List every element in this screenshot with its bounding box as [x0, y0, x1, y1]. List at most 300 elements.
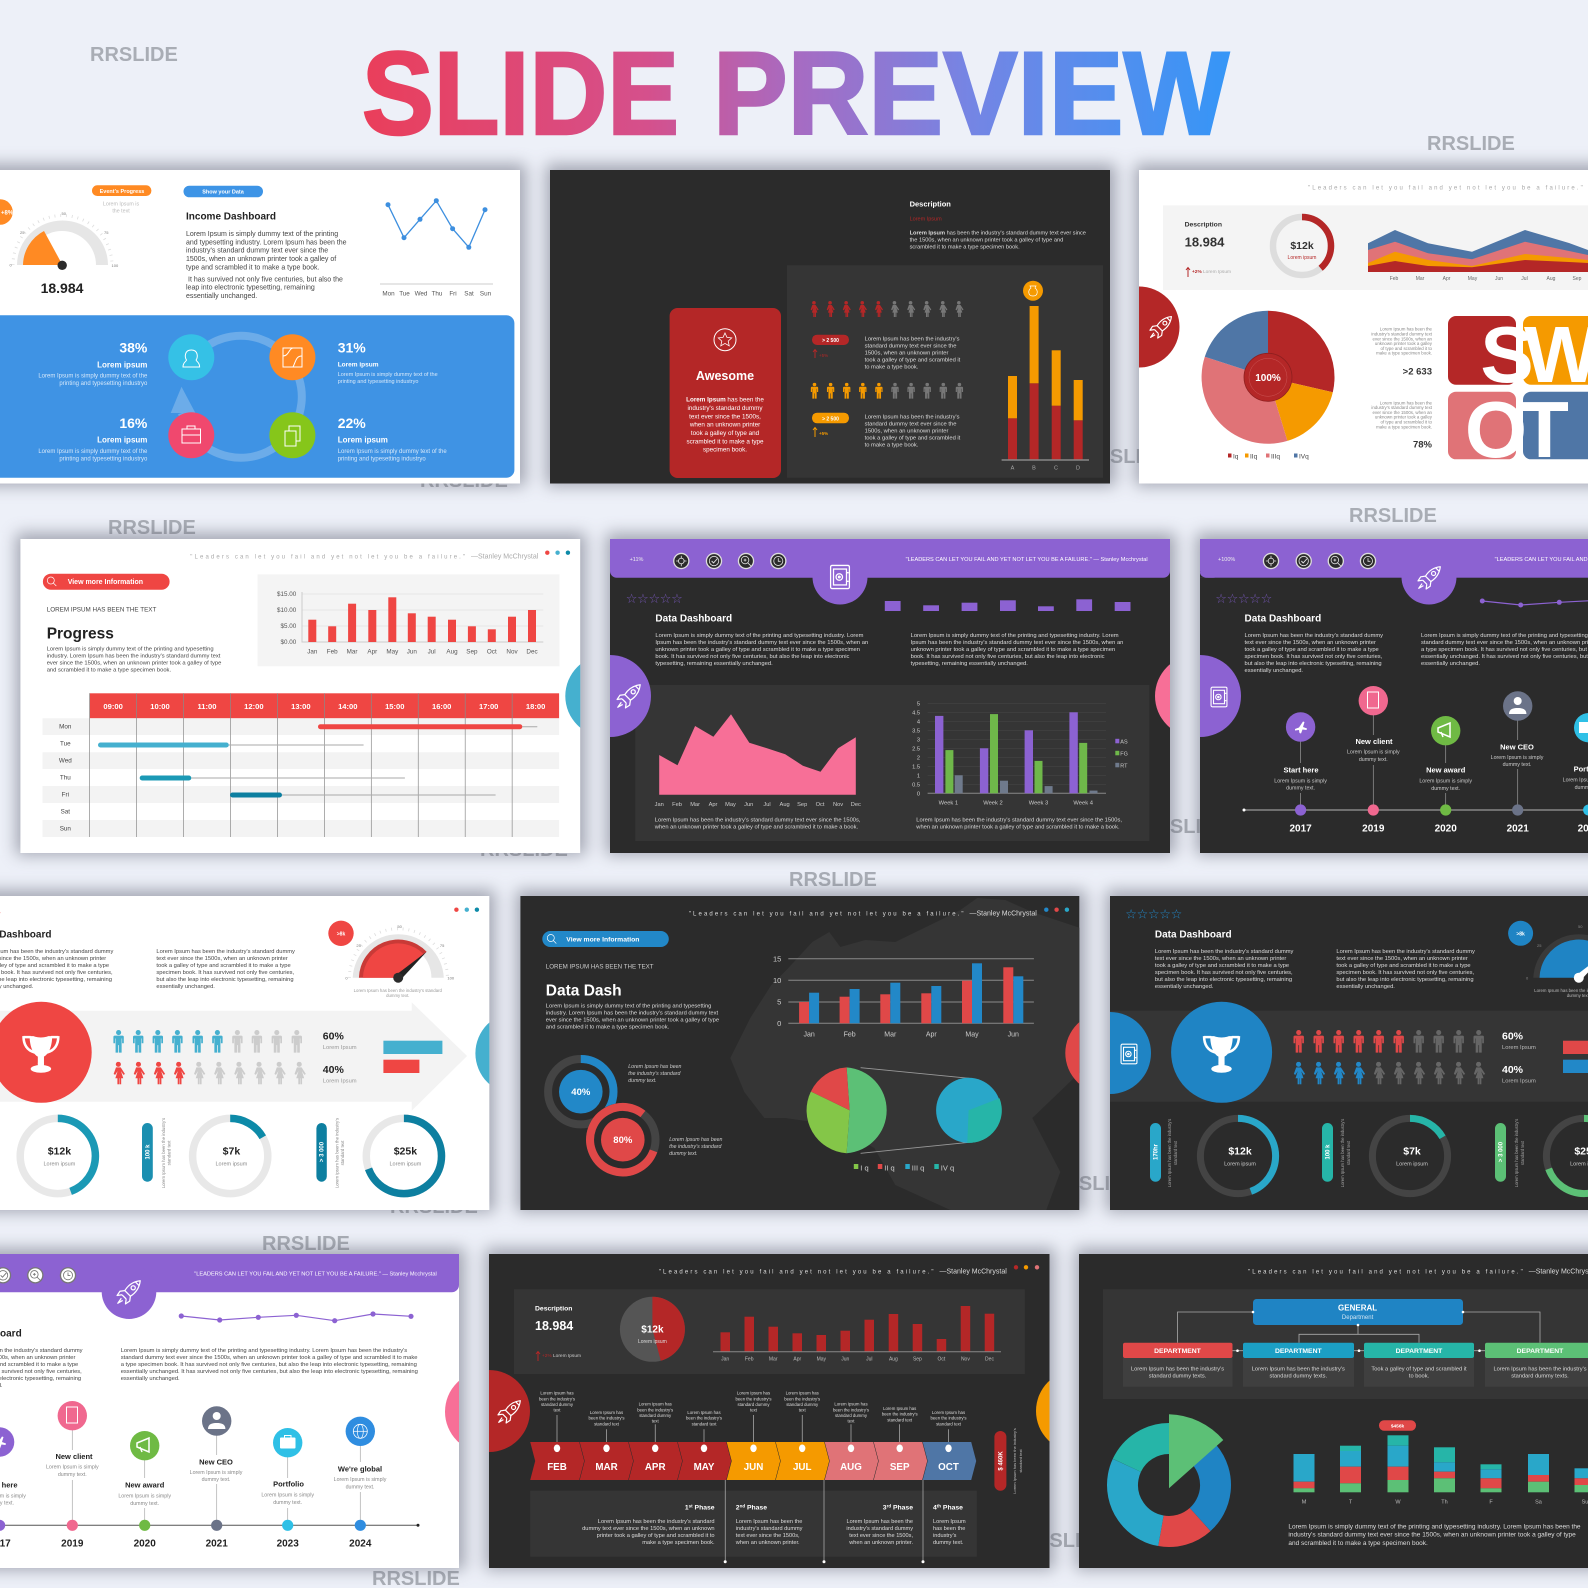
phase 1: printer took a galley of type and scrambled it to — [597, 1533, 715, 1539]
text block: 1500s, when an unknown printer — [865, 428, 948, 434]
milestone 2023: 2023 — [277, 1539, 299, 1550]
body column: Lorem Ipsum is simply dummy text of the printing and typesetting industry. Lorem — [911, 633, 1119, 639]
body column: a type specimen book. It has survived not only five centuries, but also the leap into electronic typesetting, remaining — [121, 1362, 417, 1368]
watermark: RRSLIDE — [108, 517, 196, 539]
title — [362, 28, 1230, 160]
bar chart panel: Jun — [407, 649, 417, 656]
gauge: Lorem Ipsum has been the industry's standard — [354, 988, 443, 993]
department notes — [1123, 1358, 1588, 1387]
gauge — [345, 924, 455, 998]
area chart: Feb — [1390, 276, 1399, 282]
grouped bar chart — [912, 701, 1128, 806]
map background — [730, 898, 1080, 1210]
text block with stat: unknown printer took a galley — [1375, 341, 1433, 346]
milestone 2020: 2020 — [1435, 824, 1457, 835]
stats: Lorem Ipsum — [1502, 1045, 1536, 1051]
header band — [0, 1254, 459, 1292]
milestone 2020: 2020 — [134, 1539, 156, 1550]
body text: essentially unchanged. — [186, 293, 257, 300]
milestone 2019 — [46, 1401, 99, 1550]
phase 2: Phase — [745, 1504, 767, 1511]
bar chart: 15 — [773, 954, 781, 964]
description text: Description — [910, 199, 951, 208]
body text: ever since the 1500s, when an unknown printer took a galley of type — [546, 1018, 719, 1024]
department boxes: DEPARTMENT — [1396, 1348, 1443, 1355]
area chart: Mar — [1416, 276, 1425, 282]
stacked bar chart: F — [1489, 1499, 1493, 1505]
stacked bar chart: Sa — [1535, 1499, 1543, 1505]
bar chart panel: Oct — [487, 649, 497, 656]
icon circle: rocket — [102, 1264, 156, 1319]
notes above chevrons: Lorem Ipsum has — [932, 1410, 965, 1415]
caption: the text — [112, 208, 130, 214]
pill + caption: standard text — [1520, 1140, 1525, 1165]
stacked bar chart: A — [1011, 465, 1015, 471]
body column — [0, 1348, 83, 1389]
legend: Iq — [1233, 454, 1239, 460]
card: awesome: when an unknown printer — [689, 422, 760, 429]
pill: show your data: Show your Data — [202, 190, 245, 196]
body text: industry's standard dummy text ever since the 1500s, when an unknown printer took a galley of type — [1288, 1532, 1576, 1539]
stat 16%: Lorem ipsum — [97, 436, 147, 445]
notes above chevrons: been the industry's — [882, 1412, 918, 1417]
stats — [323, 1030, 357, 1084]
header band: +11% — [630, 557, 644, 563]
body column: specimen book. It has survived not only five centuries, — [1244, 654, 1383, 660]
panel — [635, 685, 1149, 841]
stats — [1502, 1030, 1536, 1084]
schedule table: Mon — [59, 724, 72, 730]
body column: text ever since the 1500s, when an unknown printer — [1244, 640, 1376, 646]
pill + caption — [1322, 1119, 1351, 1187]
phase 2: industry's standard dummy — [736, 1526, 803, 1532]
schedule table: Thu — [60, 774, 71, 782]
milestone 2017: dummy text. — [1286, 785, 1315, 791]
notes above chevrons: been the industry's — [784, 1396, 820, 1401]
pill: view more: View more Information — [68, 579, 143, 586]
milestone 2021 — [190, 1406, 243, 1550]
line chart: Mon — [382, 291, 395, 298]
bar chart: Aug — [889, 1357, 898, 1363]
chevron timeline: MAR — [595, 1462, 618, 1473]
description text — [910, 199, 1086, 250]
heading: Data Dashboard — [655, 614, 732, 625]
area chart: Aug — [1547, 276, 1556, 282]
bar chart: Apr — [793, 1357, 802, 1363]
gauge — [1526, 924, 1588, 998]
pill + caption: 100 k — [1326, 1144, 1332, 1160]
donut $25k — [1546, 1118, 1588, 1194]
body text: leap into electronic typesetting, remaining — [186, 285, 315, 292]
pictogram: women — [1294, 1062, 1485, 1084]
schedule table: 15:00 — [385, 702, 405, 711]
legend: IVq — [1299, 454, 1309, 460]
body column: took a galley of type and scrambled it to make a type — [1244, 647, 1379, 653]
body column: Lorem Ipsum has been the industry's standard dummy — [1336, 949, 1475, 955]
body column: essentially unchanged. — [121, 1376, 180, 1382]
schedule table: Sat — [61, 808, 70, 816]
icon circle: rocket — [448, 1370, 530, 1452]
legend: IIIq — [1271, 454, 1280, 460]
stacked bar chart: D — [1076, 465, 1080, 471]
gauge: 50 — [1578, 924, 1583, 929]
donut: Lorem ipsum — [1288, 255, 1316, 261]
caption: dummy text. — [628, 1078, 657, 1084]
slide: timeline light — [0, 1254, 459, 1568]
area chart: Jul — [1521, 276, 1528, 282]
stacked bar chart: T — [1349, 1499, 1353, 1505]
notes above chevrons: Lorem Ipsum has — [590, 1410, 623, 1415]
body column: text ever since the 1500s, when an unknown printer — [1155, 956, 1286, 962]
text block with stat: 78% — [1413, 439, 1433, 450]
body column: Lorem Ipsum has been the industry's standard dummy — [1155, 949, 1294, 955]
phase 4: industry's — [933, 1533, 957, 1539]
pill + caption: > 3 000 — [320, 1141, 326, 1162]
body text: Lorem Ipsum is simply dummy text of the printing — [186, 231, 338, 238]
icon: documents — [269, 412, 315, 458]
phase dividers — [724, 1480, 924, 1563]
area chart: Sep — [797, 802, 807, 808]
body column — [121, 1348, 418, 1382]
schedule table: Fri — [62, 792, 69, 798]
line chart: Fri — [449, 291, 457, 298]
phase 4: Phase — [941, 1504, 963, 1511]
general box: GENERAL — [1338, 1304, 1377, 1313]
body column: book. It has survived not only five centuries, but also the leap into electronic — [911, 654, 1105, 660]
arrow band — [0, 1002, 467, 1111]
panel: summary — [514, 1289, 1025, 1374]
caption — [103, 202, 139, 214]
description — [535, 1305, 581, 1361]
body text: It has survived not only five centuries, but also the — [188, 276, 343, 283]
bar chart panel: Sep — [466, 649, 478, 656]
stars: ☆☆☆☆☆ — [1125, 908, 1182, 922]
vertical pill + caption — [994, 1428, 1023, 1494]
pictogram: men — [811, 383, 963, 399]
grouped bar chart: 3.5 — [912, 728, 920, 734]
stat 22%: Lorem ipsum — [338, 436, 388, 445]
text block: to make a type book. — [865, 442, 919, 448]
phase 4: dummy text. — [933, 1540, 964, 1546]
gauge: 0 — [10, 262, 12, 268]
notes above chevrons: text — [799, 1408, 806, 1413]
phase 2: text ever since the 1500s, — [736, 1533, 800, 1539]
pill + caption: 170hr — [1154, 1143, 1160, 1160]
donut $12k: $12k — [1228, 1145, 1252, 1157]
watermark: RRSLIDE — [1349, 505, 1437, 527]
caption: Lorem Ipsum has been — [628, 1064, 681, 1070]
stat 16%: Lorem Ipsum is simply dummy text of the — [38, 449, 148, 455]
slide: timeline dark — [1200, 539, 1588, 853]
side circle — [565, 655, 647, 737]
milestone 2020 — [118, 1431, 171, 1550]
body column — [1244, 633, 1383, 674]
milestone 2024: dummy text. — [346, 1484, 374, 1490]
schedule table: Wed — [59, 758, 72, 764]
notes above chevrons: Lorem Ipsum has — [540, 1391, 574, 1396]
stat 38%: 38% — [119, 340, 148, 356]
description text: the 1500s, when an unknown printer took a galley of type and — [910, 237, 1063, 243]
stat 22%: Lorem Ipsum is simply dummy text of the — [338, 449, 447, 455]
grouped bar chart: Week 4 — [1073, 800, 1094, 806]
donut $25k — [366, 1118, 441, 1194]
swot tiles — [1448, 310, 1588, 474]
chevron timeline: AUG — [840, 1462, 862, 1473]
notes above chevrons: been the industry's — [589, 1416, 624, 1421]
pill: show your data — [184, 186, 263, 197]
quote: "Leaders can let you fail and yet not let you be a failure." —Stanley McChrystal — [1248, 1268, 1588, 1275]
stat 38%: Lorem Ipsum is simply dummy text of the — [38, 374, 148, 380]
panel: phases — [530, 1491, 977, 1557]
body column: Ipsum has been the industry's standard dummy text ever since the 1500s, when an — [655, 640, 868, 646]
notes above chevrons: standard text — [692, 1421, 717, 1426]
milestone 2019: New client — [1355, 737, 1393, 746]
body column: but also the leap into electronic typesetting, remaining — [156, 977, 294, 983]
phase 3: Lorem Ipsum has been the — [846, 1519, 913, 1525]
bar chart panel: Mar — [347, 649, 358, 656]
body text — [186, 231, 347, 300]
bar chart panel: $10.00 — [277, 607, 297, 614]
pill — [812, 335, 849, 358]
schedule table: 12:00 — [244, 702, 264, 711]
text block with stat — [1371, 327, 1433, 377]
pie chart — [1202, 311, 1335, 444]
stat 22%: printing and typesetting industryo — [338, 456, 426, 462]
bar chart: Jun — [841, 1357, 850, 1363]
body text: industry's standard dummy text ever since the — [186, 248, 328, 255]
body column — [0, 949, 113, 990]
subheading: LOREM IPSUM HAS BEEN THE TEXT — [47, 607, 156, 614]
pill — [812, 413, 849, 437]
text: RRSLIDE — [480, 839, 568, 861]
quote: "Leaders can let you fail and yet not let you be a failure." —Stanley McChrystal — [689, 911, 1037, 918]
caption: dummy text. — [669, 1151, 698, 1157]
line chart: Tue — [399, 291, 410, 298]
body column: Lorem Ipsum is simply dummy text of the printing and typesetting industry. Lorem Ipsum has been the industry's — [121, 1348, 407, 1354]
stacked bar chart — [1002, 281, 1089, 471]
badge: >8k — [337, 931, 345, 937]
text: RRSLIDE — [390, 1196, 478, 1218]
caption — [915, 818, 1122, 831]
chevron timeline: APR — [645, 1462, 666, 1473]
text block — [865, 414, 961, 448]
body text: Lorem Ipsum is simply dummy text of the printing and typesetting — [47, 646, 214, 652]
schedule table: 16:00 — [432, 702, 451, 711]
notes above chevrons: been the industry's — [736, 1396, 771, 1401]
pill + caption: standard text — [1346, 1140, 1351, 1165]
milestone 2020 — [1419, 716, 1472, 835]
schedule table: 13:00 — [291, 702, 311, 711]
icon: team — [168, 334, 214, 380]
gauge: 0 — [345, 976, 348, 980]
bar chart: Apr — [926, 1031, 937, 1038]
pill + caption: Lorem Ipsum has been the industry's — [1167, 1119, 1172, 1187]
milestone 2020: Lorem Ipsum is simply — [118, 1494, 171, 1500]
line chart: Wed — [415, 291, 428, 298]
bar chart: Sep — [913, 1357, 922, 1363]
notes above chevrons: standard dummy — [639, 1413, 672, 1418]
quote: "Leaders can let you fail and yet not let you be a failure." — [1308, 185, 1585, 191]
phase 1: st — [689, 1503, 693, 1508]
line chart — [380, 198, 493, 298]
grouped bar chart: 2 — [917, 755, 920, 761]
donut $12k: Lorem ipsum — [1224, 1162, 1256, 1168]
area chart: Jun — [1495, 276, 1503, 282]
area chart: Apr — [709, 802, 718, 808]
milestone 2024 — [334, 1417, 387, 1550]
gauge: 0 — [1526, 976, 1529, 980]
grouped bar chart: 3 — [917, 737, 920, 743]
pie — [620, 1297, 685, 1362]
notes above chevrons — [539, 1391, 966, 1426]
body text: 1500s, when an unknown printer took a galley of — [186, 256, 336, 263]
area chart: Sep — [1573, 276, 1582, 282]
schedule table: 10:00 — [150, 702, 170, 711]
bar chart: 0 — [777, 1019, 781, 1028]
swot tiles: O — [1465, 385, 1527, 474]
text block with stat: Lorem Ipsum has been the — [1380, 400, 1433, 405]
area chart: May — [1468, 276, 1478, 282]
body column: essentially unchanged. — [1155, 984, 1214, 990]
pill: view more: View more Information — [566, 936, 639, 944]
body column: Lorem Ipsum has been the industry's standard dummy — [156, 949, 295, 955]
area chart — [1368, 230, 1588, 282]
notes above chevrons: been the industry's — [931, 1416, 966, 1421]
donut: $12k — [1290, 240, 1314, 252]
vertical pill + caption: $ 460K — [998, 1451, 1004, 1471]
badge: $456k — [1391, 1424, 1404, 1430]
bar chart panel: May — [386, 649, 399, 656]
bar chart panel: Dec — [526, 649, 538, 656]
milestone 2023 — [261, 1428, 314, 1550]
notes above chevrons: standard text — [936, 1421, 962, 1426]
bar chart: Oct — [938, 1357, 946, 1363]
pill + caption: standard text — [340, 1140, 345, 1165]
milestone 2020: dummy text. — [130, 1501, 159, 1507]
badge — [1508, 921, 1533, 946]
stat 31%: Lorem ipsum — [338, 361, 379, 368]
chevron timeline: JUN — [744, 1462, 763, 1473]
text block with stat: make a type specimen book. — [1376, 351, 1432, 356]
body column — [1421, 633, 1588, 667]
pill: +5% — [819, 431, 828, 436]
caption — [669, 1137, 722, 1157]
bars — [383, 1041, 442, 1073]
description text: scrambled it to make a type specimen book. — [910, 244, 1020, 250]
text block: 1500s, when an unknown printer — [865, 350, 948, 356]
phase 4 — [933, 1503, 966, 1546]
schedule table: 17:00 — [479, 702, 498, 711]
phase 1 — [582, 1503, 715, 1546]
notes above chevrons: Lorem Ipsum has — [737, 1391, 770, 1396]
chevron timeline: OCT — [938, 1462, 959, 1473]
heading: Data Dash — [546, 983, 622, 1000]
notes above chevrons: Lorem Ipsum has — [786, 1391, 819, 1396]
text block with stat: of type and scrambled it to — [1380, 420, 1433, 424]
card: awesome: Awesome — [696, 369, 754, 383]
text block with stat: unknown printer took a galley — [1375, 415, 1433, 420]
text block with stat: industry's standard dummy text — [1371, 405, 1433, 410]
area chart: Jan — [655, 802, 664, 808]
swot tiles: T — [1520, 385, 1569, 474]
slide: swot light — [1139, 170, 1588, 484]
gauge value: 18.984 — [41, 280, 84, 296]
gantt bars — [98, 724, 537, 798]
grouped bar chart: Week 2 — [983, 800, 1003, 806]
vertical pill + caption: standard text — [1018, 1449, 1023, 1473]
body text: Lorem Ipsum is simply dummy text of the printing and typesetting — [546, 1004, 711, 1010]
gauge: dummy text. — [386, 993, 410, 998]
bar chart panel: $0.00 — [281, 639, 297, 646]
milestone 2017: Start here — [1283, 765, 1319, 774]
grouped bar chart: AS — [1120, 739, 1128, 745]
body column: unknown printer took a galley of type and scrambled it to make a type specimen — [911, 647, 1115, 653]
donut $7k: Lorem ipsum — [1396, 1162, 1428, 1168]
dots — [1014, 1265, 1039, 1270]
card: awesome: took a galley of type and — [691, 430, 760, 437]
pie of pie chart — [807, 1067, 1002, 1153]
body text: and scrambled it to make a type specimen book. — [1288, 1540, 1428, 1547]
pill: > 2 500 — [822, 416, 839, 422]
description: Lorem Ipsum — [553, 1353, 581, 1359]
notes above chevrons: standard dummy — [835, 1413, 868, 1418]
watermark: RRSLIDE — [789, 869, 877, 891]
bar chart panel: $5.00 — [281, 623, 297, 630]
donut — [1273, 217, 1331, 275]
body column: typesetting, remaining essentially unchanged. — [655, 661, 773, 667]
text block with stat — [1371, 400, 1433, 450]
phase 3: 3 — [883, 1504, 887, 1511]
caption: when an unknown printer took a galley of type and scrambled it to make a book. — [915, 825, 1120, 831]
body column: standard dummy text ever since the 1500s, when an unknown printer took a galley of type and scrambled it to make — [121, 1355, 417, 1361]
watermark: RRSLIDE — [262, 1233, 350, 1255]
vertical pill + caption: Lorem Ipsum has been the industry's — [1012, 1428, 1017, 1494]
text block: standard dummy text ever since the — [865, 343, 956, 349]
milestone 2021: dummy text. — [202, 1477, 230, 1483]
dots — [1044, 908, 1069, 912]
body column: essentially unchanged. — [1336, 984, 1395, 990]
stat 16%: printing and typesetting industryo — [59, 456, 148, 462]
gauge: 25 — [1537, 943, 1542, 948]
milestone 2024: We're global — [338, 1465, 382, 1474]
side circle — [1065, 1012, 1147, 1094]
milestone 2021: dummy text. — [1503, 762, 1531, 768]
phase 2: nd — [740, 1503, 745, 1508]
pill + caption — [316, 1118, 345, 1188]
stat 38% — [38, 340, 148, 387]
stat 31% — [338, 340, 438, 385]
legend — [854, 1164, 954, 1172]
bar chart panel: Jul — [428, 649, 436, 656]
timeline — [0, 1401, 420, 1550]
chevron timeline: SEP — [890, 1462, 910, 1473]
donut 40% — [548, 1059, 614, 1124]
exploded donut chart — [1103, 1414, 1235, 1551]
slide: awesome dark — [550, 170, 1110, 484]
quote: "Leaders can let you fail and yet not let you be a failure." —Stanley McChrystal — [190, 553, 539, 560]
area chart: May — [725, 802, 736, 808]
phase 4: has been the — [933, 1526, 965, 1532]
body column: book. It has survived not only five centuries, but also the leap into electronic — [655, 654, 849, 660]
department notes: Lorem Ipsum has been the industry's — [1252, 1366, 1345, 1372]
stat 16% — [38, 415, 148, 462]
gauge: 75 — [440, 943, 445, 948]
badge — [1379, 1420, 1416, 1431]
icon circle: safe — [1159, 655, 1241, 737]
stacked bar chart: B — [1032, 465, 1036, 471]
stats: Lorem Ipsum — [1502, 1078, 1536, 1084]
bar chart: Jul — [866, 1357, 873, 1363]
